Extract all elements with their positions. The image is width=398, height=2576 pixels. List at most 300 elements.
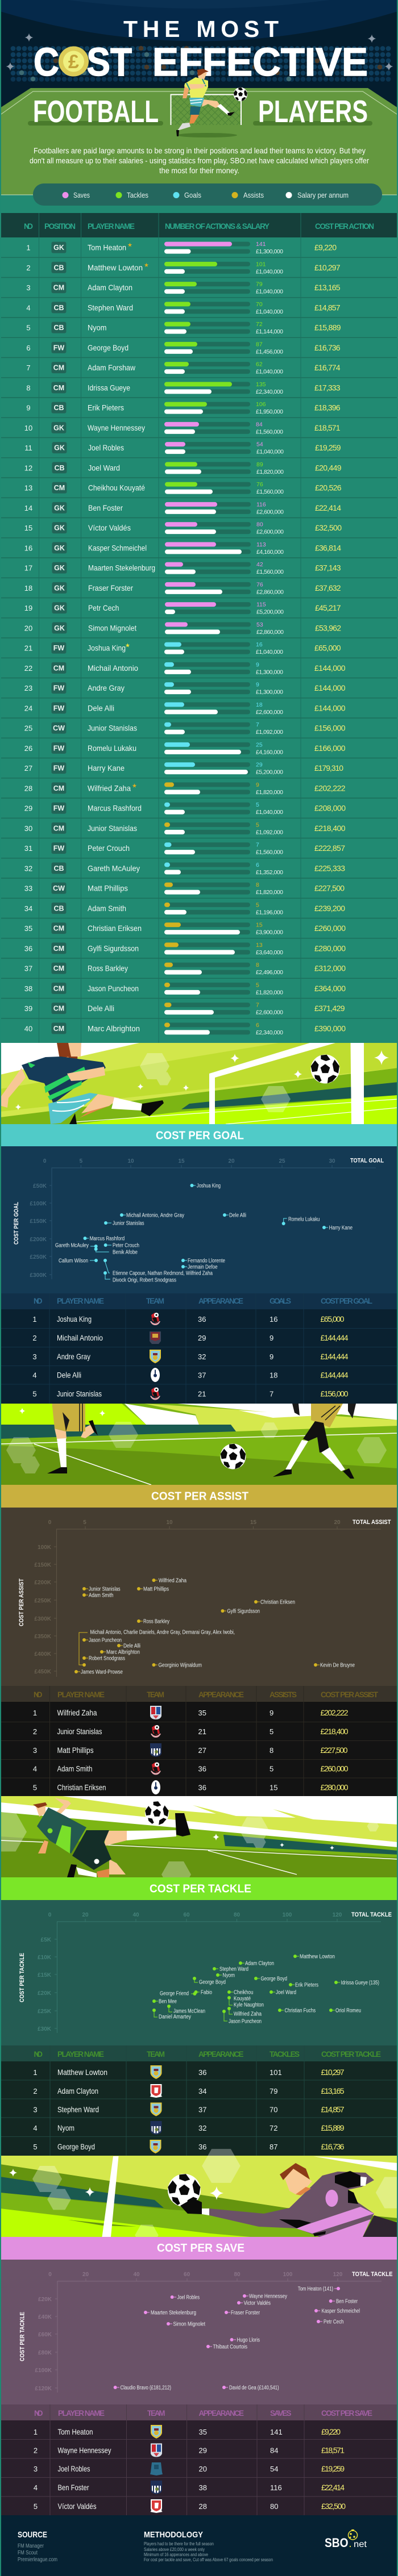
table: cost per tackle: NO [34, 2050, 43, 2059]
row 40: Marc Albrighton: 6 [256, 1022, 259, 1029]
row: Víctor Valdés: £32,500 [321, 2502, 346, 2511]
row: Víctor Valdés: 80 [270, 2502, 278, 2511]
table: cost per tackle [0, 2045, 398, 2156]
data points: Benik Afobe [113, 1250, 138, 1255]
data points: Tom Heaton (141) [298, 2286, 333, 2293]
scatter chart: cost per assist: 15 [250, 1519, 256, 1526]
row 34: Adam Smith [24, 901, 345, 916]
row 38: Jason Puncheon: 38 [24, 984, 32, 993]
row 21: Joshua King: ★ [125, 643, 130, 649]
table: cost per save: SAVES [270, 2409, 291, 2418]
row: Wayne Hennessey [34, 2444, 345, 2457]
row 20: Simon Mignolet: Simon Mignolet [88, 623, 136, 632]
row 39: Dele Alli: £371,429 [314, 1004, 345, 1013]
row 31: Peter Crouch: £1,560,000 [256, 849, 283, 856]
row 5: Nyom: 72 [256, 321, 263, 328]
scatter chart: cost per goal: TOTAL GOAL [350, 1158, 384, 1164]
row: Junior Stanislas: 2 [33, 1727, 37, 1736]
row 4: Stephen Ward: Stephen Ward [88, 303, 133, 312]
table: cost per tackle: TEAM [147, 2050, 165, 2059]
logo: SBO.net: net [354, 2540, 367, 2549]
scatter chart: cost per tackle: 80 [234, 1912, 240, 1918]
row: Adam Smith: 4 [33, 1764, 37, 1773]
row 14: Ben Foster: £22,414 [315, 503, 341, 512]
row 24: Dele Alli [24, 702, 346, 716]
row 7: Adam Forshaw: Adam Forshaw [88, 363, 136, 372]
row 23: Andre Gray: FW [53, 684, 64, 692]
data points: Marcus Rashford [90, 1236, 125, 1242]
row 21: Joshua King: Joshua King [88, 644, 126, 653]
row 27: Harry Kane: £5,200,000 [256, 769, 283, 776]
row: Michail Antonio: 9 [270, 1334, 273, 1342]
row: Joel Robles [34, 2462, 345, 2475]
data points: Michail Antonio, Andre Gray [126, 1212, 184, 1219]
row 25: Junior Stanislas: £1,092,000 [256, 729, 283, 736]
row 13: Cheikhou Kouyaté: 76 [256, 481, 263, 488]
row 21: Joshua King: £1,040,000 [256, 649, 283, 656]
row 9: Erik Pieters: £1,950,000 [256, 408, 283, 415]
row: Adam Smith [33, 1762, 349, 1775]
row 3: Adam Clayton: £1,040,000 [256, 289, 283, 295]
title line 2: COST [34, 40, 132, 84]
table: cost per goal: GOALS [270, 1297, 291, 1305]
scatter chart: cost per tackle: 20 [82, 1912, 89, 1918]
row 32: Gareth McAuley: 6 [256, 862, 259, 869]
row 37: Ross Barkley: £312,000 [314, 964, 346, 973]
data points: Junior Stanislas [113, 1220, 144, 1227]
scatter chart: cost per save: 120 [333, 2272, 343, 2278]
row: Christian Eriksen: 15 [270, 1784, 277, 1792]
row 29: Marcus Rashford: FW [53, 804, 64, 812]
source [18, 2530, 57, 2563]
row 16: Kasper Schmeichel [24, 541, 341, 556]
data points: Jason Puncheon [89, 1637, 122, 1644]
table: cost per save: NO [34, 2409, 43, 2418]
row 22: Michail Antonio: CM [53, 664, 64, 672]
data points: George Boyd [260, 1976, 287, 1982]
data points: Christian Fuchs [284, 2007, 316, 2014]
row 17: Maarten Stekelenburg: £37,143 [315, 563, 341, 573]
row 39: Dele Alli: 39 [24, 1004, 32, 1013]
row 12: Joel Ward: £1,820,000 [256, 469, 284, 475]
data points: Hugo Lloris [237, 2337, 260, 2344]
row 20: Simon Mignolet: 53 [256, 621, 263, 628]
row 13: Cheikhou Kouyaté [24, 481, 342, 495]
row 8: Idrissa Gueye: £17,333 [314, 383, 341, 392]
banner: cost per goal [0, 1124, 398, 1146]
row 29: Marcus Rashford: Marcus Rashford [88, 804, 142, 813]
row 32: Gareth McAuley [24, 862, 345, 876]
table: cost per tackle: PLAYER NAME [57, 2050, 104, 2059]
row: Wayne Hennessey: £18,571 [321, 2446, 345, 2455]
row 22: Michail Antonio: Michail Antonio [88, 663, 138, 673]
row: Stephen Ward: Stephen Ward [57, 2105, 99, 2114]
data points: Joel Robles [177, 2295, 200, 2301]
row 4: Stephen Ward: CB [53, 304, 64, 312]
row 5: Nyom [26, 321, 341, 335]
row: Michail Antonio: 2 [32, 1334, 37, 1342]
table: cost per save: APPEARANCE [199, 2409, 244, 2418]
row 9: Erik Pieters: 9 [26, 404, 31, 412]
row 27: Harry Kane: £179,310 [314, 763, 343, 773]
row: Tom Heaton: 141 [270, 2428, 283, 2436]
row: Ben Foster: £22,414 [321, 2483, 345, 2492]
footer [0, 2515, 398, 2576]
row 18: Fraser Forster: Fraser Forster [88, 583, 133, 592]
row 28: Wilfried Zaha: £1,820,000 [256, 789, 283, 796]
legend: Goals [184, 191, 201, 199]
row 22: Michail Antonio: 9 [256, 661, 259, 668]
row: Junior Stanislas: 21 [198, 1389, 206, 1398]
icon: football [234, 87, 247, 101]
row 29: Marcus Rashford: 29 [24, 804, 32, 813]
scatter chart: cost per save [0, 2260, 398, 2404]
row: Stephen Ward: 37 [198, 2105, 206, 2114]
row: Joel Robles: 3 [34, 2465, 38, 2473]
row: Stephen Ward: 70 [270, 2105, 277, 2114]
data points: Kasper Schmeichel [322, 2308, 360, 2314]
row 34: Adam Smith: 5 [256, 901, 259, 908]
row: Nyom: Nyom [57, 2123, 74, 2132]
row 21: Joshua King: FW [53, 644, 64, 652]
row: Wayne Hennessey: 29 [199, 2446, 207, 2455]
data points: Peter Crouch [113, 1243, 139, 1249]
row 39: Dele Alli: Dele Alli [88, 1004, 114, 1013]
row 30: Junior Stanislas [24, 821, 346, 836]
row 37: Ross Barkley: CM [53, 965, 64, 972]
row: Tom Heaton [34, 2425, 341, 2439]
table: cost per save [0, 2404, 398, 2515]
data points: Daniel Amartey [159, 2014, 191, 2020]
row 16: Kasper Schmeichel: 113 [256, 541, 266, 548]
row 35: Christian Eriksen: CM [53, 925, 64, 933]
banner: cost per tackle [0, 1877, 398, 1900]
row 3: Adam Clayton [26, 281, 341, 295]
scatter chart: cost per assist: £350K [35, 1634, 52, 1640]
row 12: Joel Ward: £20,449 [315, 463, 342, 472]
row 2: Matthew Lowton: £1,040,000 [256, 268, 283, 275]
scatter chart: cost per goal [0, 1146, 398, 1293]
row 14: Ben Foster: 14 [24, 504, 32, 512]
row 16: Kasper Schmeichel: £36,814 [315, 543, 341, 552]
row 10: Wayne Hennessey: £18,571 [314, 423, 341, 432]
data points: Fabio [201, 1989, 212, 1996]
row 7: Adam Forshaw: 62 [256, 361, 263, 368]
row 33: Matt Phillips [24, 882, 345, 896]
row: Junior Stanislas: Junior Stanislas [57, 1727, 102, 1736]
row 21: Joshua King: £65,000 [314, 644, 341, 653]
row 22: Michail Antonio: £1,300,000 [256, 669, 283, 675]
data points: Kouyaté [234, 1996, 251, 2002]
table: cost per assist: APPEARANCE [198, 1690, 244, 1699]
row 1: Tom Heaton: £9,220 [314, 243, 337, 252]
row 38: Jason Puncheon: Jason Puncheon [88, 984, 139, 993]
scatter chart: cost per assist: 5 [83, 1519, 86, 1526]
data points: Ben Foster [336, 2298, 358, 2305]
scatter chart: cost per goal: COST PER GOAL [13, 1202, 20, 1245]
row 14: Ben Foster: GK [54, 504, 65, 512]
table: cost per assist: TEAM [147, 1690, 164, 1699]
row 36: Gylfi Sigurdsson: £280,000 [314, 943, 346, 953]
data points: Harry Kane [329, 1225, 353, 1231]
row 23: Andre Gray [24, 682, 346, 696]
data points: Erik Pieters [295, 1982, 318, 1988]
row 28: Wilfried Zaha [24, 782, 346, 796]
row: Wilfried Zaha: £202,222 [321, 1708, 349, 1717]
methodology [144, 2530, 273, 2562]
row 1: Tom Heaton: ★ [127, 243, 132, 249]
row: Junior Stanislas: £218,400 [321, 1727, 349, 1736]
row 26: Romelu Lukaku: 25 [256, 741, 263, 748]
row 4: Stephen Ward: £1,040,000 [256, 308, 283, 315]
row: Wayne Hennessey: 84 [270, 2446, 278, 2455]
row 19: Petr Cech: 19 [24, 604, 32, 612]
row 18: Fraser Forster: 18 [24, 584, 32, 592]
legend: Salary per annum [297, 191, 349, 199]
row 40: Marc Albrighton [24, 1022, 346, 1036]
row: Andre Gray: 32 [198, 1352, 206, 1361]
row 37: Ross Barkley: £2,496,000 [256, 969, 283, 976]
icon: pound coin: £ [68, 51, 79, 73]
scatter chart: cost per save: £80K [38, 2350, 52, 2356]
methodology: Minimum of 16 apperances and above [144, 2552, 208, 2557]
row 2: Matthew Lowton: Matthew Lowton [88, 263, 143, 272]
row 11: Joel Robles: £19,259 [315, 443, 341, 452]
row: Adam Smith: Adam Smith [57, 1764, 92, 1773]
scatter chart: cost per goal: £100K [30, 1201, 47, 1207]
row: Adam Smith: 36 [198, 1764, 206, 1773]
main table header: NUMBER OF ACTIONS & SALARY [165, 222, 270, 231]
scatter chart: cost per tackle: £30K [38, 2026, 52, 2032]
row 11: Joel Robles: 54 [256, 441, 263, 448]
row 7: Adam Forshaw: CM [53, 364, 64, 372]
row 2: Matthew Lowton: ★ [144, 262, 149, 269]
row 6: George Boyd: George Boyd [88, 343, 128, 352]
goal [171, 94, 241, 125]
banner: cost per save [0, 2237, 398, 2260]
row 24: Dele Alli: £2,600,000 [256, 709, 283, 716]
data points: Idrissa Gueye (135) [341, 1980, 379, 1986]
row 1: Tom Heaton: GK [53, 244, 64, 252]
row 13: Cheikhou Kouyaté: 13 [24, 484, 32, 492]
row 1: Tom Heaton [26, 241, 337, 255]
player kicking ball [176, 69, 237, 137]
row 35: Christian Eriksen: £260,000 [314, 924, 346, 933]
data points: Jermain Defoe [188, 1264, 218, 1270]
row 5: Nyom: CB [53, 324, 64, 332]
scatter chart: cost per tackle [0, 1900, 398, 2045]
row 25: Junior Stanislas: £156,000 [314, 724, 346, 733]
row: Tom Heaton: 35 [199, 2428, 207, 2436]
banner: cost per goal: COST PER GOAL [156, 1129, 244, 1142]
scatter chart: cost per assist: £300K [35, 1616, 52, 1622]
sparkles [6, 33, 393, 70]
row 16: Kasper Schmeichel: Kasper Schmeichel [88, 543, 147, 552]
row 17: Maarten Stekelenburg: GK [54, 564, 65, 572]
row 2: Matthew Lowton: 101 [256, 261, 266, 268]
row: Wilfried Zaha: 35 [198, 1709, 206, 1717]
source: FM Scout [18, 2549, 38, 2556]
row 20: Simon Mignolet: 20 [24, 624, 32, 632]
row 19: Petr Cech: 115 [256, 602, 266, 608]
row 25: Junior Stanislas: 7 [256, 721, 259, 728]
row 8: Idrissa Gueye: 8 [26, 383, 31, 392]
row 2: Matthew Lowton: CB [53, 264, 64, 272]
row 25: Junior Stanislas: 25 [24, 724, 32, 733]
banner: cost per tackle: COST PER TACKLE [150, 1882, 251, 1895]
row: Andre Gray: 3 [32, 1352, 37, 1361]
row 29: Marcus Rashford: £1,040,000 [256, 809, 283, 816]
row 33: Matt Phillips: CW [53, 884, 65, 892]
table: cost per goal [0, 1293, 398, 1404]
row: Wilfried Zaha: Wilfried Zaha [57, 1708, 97, 1717]
row: Joshua King: 16 [270, 1315, 277, 1324]
data points: Romelu Lukaku [288, 1217, 320, 1222]
row 36: Gylfi Sigurdsson: £3,640,000 [256, 949, 283, 956]
scatter chart: cost per save: TOTAL TACKLE [352, 2271, 392, 2278]
data points: Maarten Stekelenburg [151, 2310, 196, 2316]
row: Junior Stanislas: 7 [270, 1389, 273, 1398]
data points: Jason Puncheon [229, 2019, 262, 2024]
row: George Boyd [33, 2140, 345, 2153]
row 18: Fraser Forster: GK [54, 584, 65, 592]
scatter chart: cost per assist: 0 [48, 1519, 52, 1526]
data points: Thibaut Courtois [213, 2344, 247, 2350]
legend: Tackles [127, 191, 148, 199]
row: Adam Smith: £260,000 [321, 1764, 349, 1773]
row 27: Harry Kane: FW [53, 765, 64, 773]
row: Ben Foster: 116 [270, 2483, 282, 2492]
row 3: Adam Clayton: £13,165 [314, 283, 341, 292]
intro text: the most for their money. [159, 166, 239, 175]
row: Stephen Ward: £14,857 [321, 2105, 345, 2114]
row 14: Ben Foster: £2,600,000 [256, 508, 284, 515]
data points: Petr Cech [324, 2319, 343, 2326]
data points: Matthew Lowton [300, 1954, 335, 1960]
data points: Adam Smith [89, 1593, 114, 1598]
row 38: Jason Puncheon: £1,820,000 [256, 989, 283, 996]
row 9: Erik Pieters: Erik Pieters [88, 403, 124, 412]
row 17: Maarten Stekelenburg [24, 561, 341, 575]
row: Christian Eriksen: Christian Eriksen [57, 1782, 106, 1792]
data points: Etienne Capoue, Nathan Redmond, Wilfried Zaha [113, 1270, 213, 1277]
row 19: Petr Cech [24, 602, 341, 616]
data points: Joshua King [197, 1183, 221, 1189]
row 8: Idrissa Gueye: £2,340,000 [256, 389, 283, 395]
row 29: Marcus Rashford [24, 801, 346, 816]
data points: James Ward-Prowse [81, 1669, 123, 1676]
data points: Kyle Naughton [234, 2002, 264, 2009]
row: Christian Eriksen: £280,000 [321, 1782, 349, 1792]
row: Junior Stanislas: 21 [198, 1727, 206, 1736]
row 9: Erik Pieters: 106 [256, 401, 266, 408]
row 29: Marcus Rashford: 5 [256, 801, 259, 808]
source: SOURCE [18, 2530, 47, 2540]
illustration: players passing [0, 1404, 398, 1485]
row 37: Ross Barkley: 37 [24, 965, 32, 973]
row 36: Gylfi Sigurdsson: 36 [24, 944, 32, 953]
scatter chart: cost per tackle: COST PER TACKLE [19, 1953, 26, 2002]
data points: Divock Origi, Robert Snodgrass [113, 1277, 176, 1284]
row: Joel Robles: Joel Robles [58, 2464, 90, 2473]
data points: Joel Ward [276, 1989, 296, 1996]
row 35: Christian Eriksen [24, 922, 346, 936]
row: Dele Alli: 37 [198, 1371, 206, 1379]
scatter chart: cost per goal: £150K [30, 1218, 47, 1225]
row 34: Adam Smith: Adam Smith [88, 904, 126, 913]
row 19: Petr Cech: £5,200,000 [256, 609, 284, 616]
row: Ben Foster: Ben Foster [58, 2483, 89, 2492]
row: Junior Stanislas [32, 1387, 349, 1400]
scatter chart: cost per goal: 5 [80, 1158, 83, 1164]
methodology: Salaries above £20,000 a week only [144, 2546, 205, 2552]
row 35: Christian Eriksen: 15 [256, 922, 263, 929]
row 18: Fraser Forster [24, 581, 341, 595]
row: Ben Foster: 4 [34, 2483, 38, 2492]
row 6: George Boyd: 87 [256, 341, 263, 348]
scatter chart: cost per assist: TOTAL ASSIST [353, 1519, 391, 1526]
row 28: Wilfried Zaha: ★ [132, 783, 137, 789]
scatter chart: cost per assist: 20 [334, 1519, 341, 1526]
row 25: Junior Stanislas: Junior Stanislas [88, 724, 137, 733]
row: Matthew Lowton: 1 [33, 2068, 38, 2077]
data points: Simon Mignolet [173, 2321, 205, 2328]
row 10: Wayne Hennessey: £1,560,000 [256, 428, 283, 435]
row 19: Petr Cech: GK [54, 604, 65, 612]
row 4: Stephen Ward: £14,857 [314, 303, 341, 312]
intro text: don't all measure up to their salaries - using statistics from play, SBO.net have calculated which players offer [30, 157, 369, 165]
scatter chart: cost per tackle: 100 [283, 1912, 292, 1918]
illustration: striker shooting at goal [0, 1043, 398, 1124]
table: cost per goal: COST PER GOAL [321, 1297, 372, 1305]
data points: Dele Alli [123, 1643, 140, 1650]
row 13: Cheikhou Kouyaté: £1,560,000 [256, 489, 284, 495]
row 12: Joel Ward [24, 461, 342, 475]
row 3: Adam Clayton: 79 [256, 281, 263, 288]
row 3: Adam Clayton: Adam Clayton [88, 283, 132, 292]
row 21: Joshua King: 21 [24, 644, 32, 653]
row: Junior Stanislas: 5 [32, 1389, 37, 1398]
row 24: Dele Alli: 18 [256, 702, 263, 708]
data points: Nyom [223, 1972, 235, 1979]
row 27: Harry Kane: 29 [256, 762, 263, 769]
row 11: Joel Robles [24, 441, 341, 456]
scatter chart: cost per save: 0 [48, 2272, 52, 2278]
data points: James McClean [173, 2009, 205, 2014]
source: Premierleague.com [18, 2556, 57, 2563]
row 36: Gylfi Sigurdsson: Gylfi Sigurdsson [88, 943, 139, 953]
row 26: Romelu Lukaku: Romelu Lukaku [88, 744, 136, 753]
scatter chart: cost per tackle: 60 [183, 1912, 190, 1918]
row 23: Andre Gray: £144,000 [314, 683, 346, 692]
data points: Kevin De Bruyne [320, 1662, 355, 1669]
data points: Adam Clayton [245, 1961, 274, 1967]
intro text: Footballers are paid large amounts to be strong in their positions and lead their teams to victory. But they [34, 147, 366, 155]
table grid lines [0, 257, 398, 1018]
row 31: Peter Crouch: Peter Crouch [88, 844, 130, 853]
row 37: Ross Barkley: Ross Barkley [88, 964, 128, 973]
row 32: Gareth McAuley: 32 [24, 864, 32, 872]
row: Adam Clayton: £13,165 [321, 2086, 345, 2095]
row 38: Jason Puncheon: £364,000 [314, 984, 346, 993]
row 5: Nyom: £1,144,000 [256, 328, 283, 335]
row 4: Stephen Ward [26, 301, 341, 315]
row: Joel Robles: 54 [270, 2465, 278, 2473]
row 37: Ross Barkley [24, 962, 346, 976]
scatter chart: cost per assist: £150K [35, 1562, 52, 1568]
data points [55, 1183, 353, 1284]
row: Junior Stanislas: £156,000 [321, 1389, 349, 1398]
